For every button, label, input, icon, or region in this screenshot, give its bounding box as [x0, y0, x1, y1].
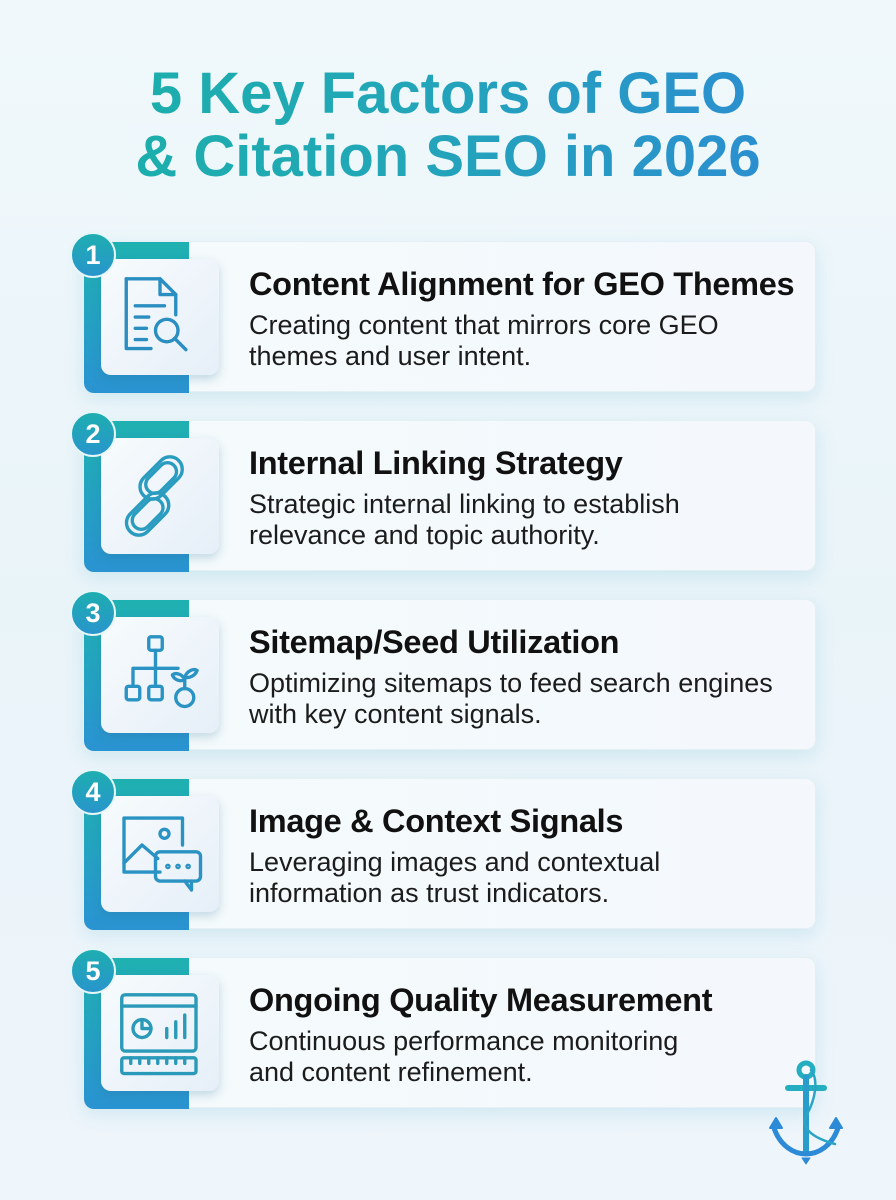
icon: chain link	[101, 438, 219, 554]
number badge 4: 4	[85, 777, 101, 807]
panel: factor 3	[83, 599, 816, 750]
number badge 2: 2	[85, 419, 101, 449]
number badge 5: 5	[85, 956, 101, 986]
number badge 2	[70, 411, 116, 457]
text 1: themes and user intent.	[249, 341, 531, 371]
text 4	[249, 847, 660, 908]
text 3: with key content signals.	[249, 699, 542, 729]
title	[0, 62, 896, 188]
title: 5 Key Factors of GEO	[150, 61, 746, 126]
text 5	[249, 1026, 678, 1087]
heading 5: Ongoing Quality Measurement	[249, 982, 712, 1018]
text 4: Leveraging images and contextual	[249, 847, 660, 877]
icon: dashboard chart	[101, 975, 219, 1091]
number badge 1	[70, 232, 116, 278]
number badge 3	[70, 590, 116, 636]
text 5: Continuous performance monitoring	[249, 1026, 678, 1056]
text 5: and content refinement.	[249, 1057, 533, 1087]
panel: factor 4	[83, 778, 816, 929]
number badge 4	[70, 769, 116, 815]
icon: document search	[101, 259, 219, 375]
icon: anchor	[769, 1060, 843, 1164]
text 3	[249, 668, 773, 729]
title: & Citation SEO in 2026	[135, 124, 761, 189]
text 2: Strategic internal linking to establish	[249, 489, 680, 519]
text 2: relevance and topic authority.	[249, 520, 600, 550]
panel: factor 5	[83, 957, 816, 1108]
icon: sitemap with seedling	[101, 617, 219, 733]
heading 2: Internal Linking Strategy	[249, 445, 623, 481]
number badge 3: 3	[85, 598, 101, 628]
text 3: Optimizing sitemaps to feed search engines	[249, 668, 773, 698]
icon: image and chat	[101, 796, 219, 912]
text 2	[249, 489, 680, 550]
text 1: Creating content that mirrors core GEO	[249, 310, 719, 340]
number badge 5	[70, 948, 116, 994]
heading 3: Sitemap/Seed Utilization	[249, 624, 619, 660]
text 1	[249, 310, 719, 371]
heading 4: Image & Context Signals	[249, 803, 623, 839]
panel: factor 2	[83, 420, 816, 571]
heading 1: Content Alignment for GEO Themes	[249, 266, 794, 302]
number badge 1: 1	[85, 240, 101, 270]
text 4: information as trust indicators.	[249, 878, 609, 908]
panel: factor 1	[83, 241, 816, 392]
